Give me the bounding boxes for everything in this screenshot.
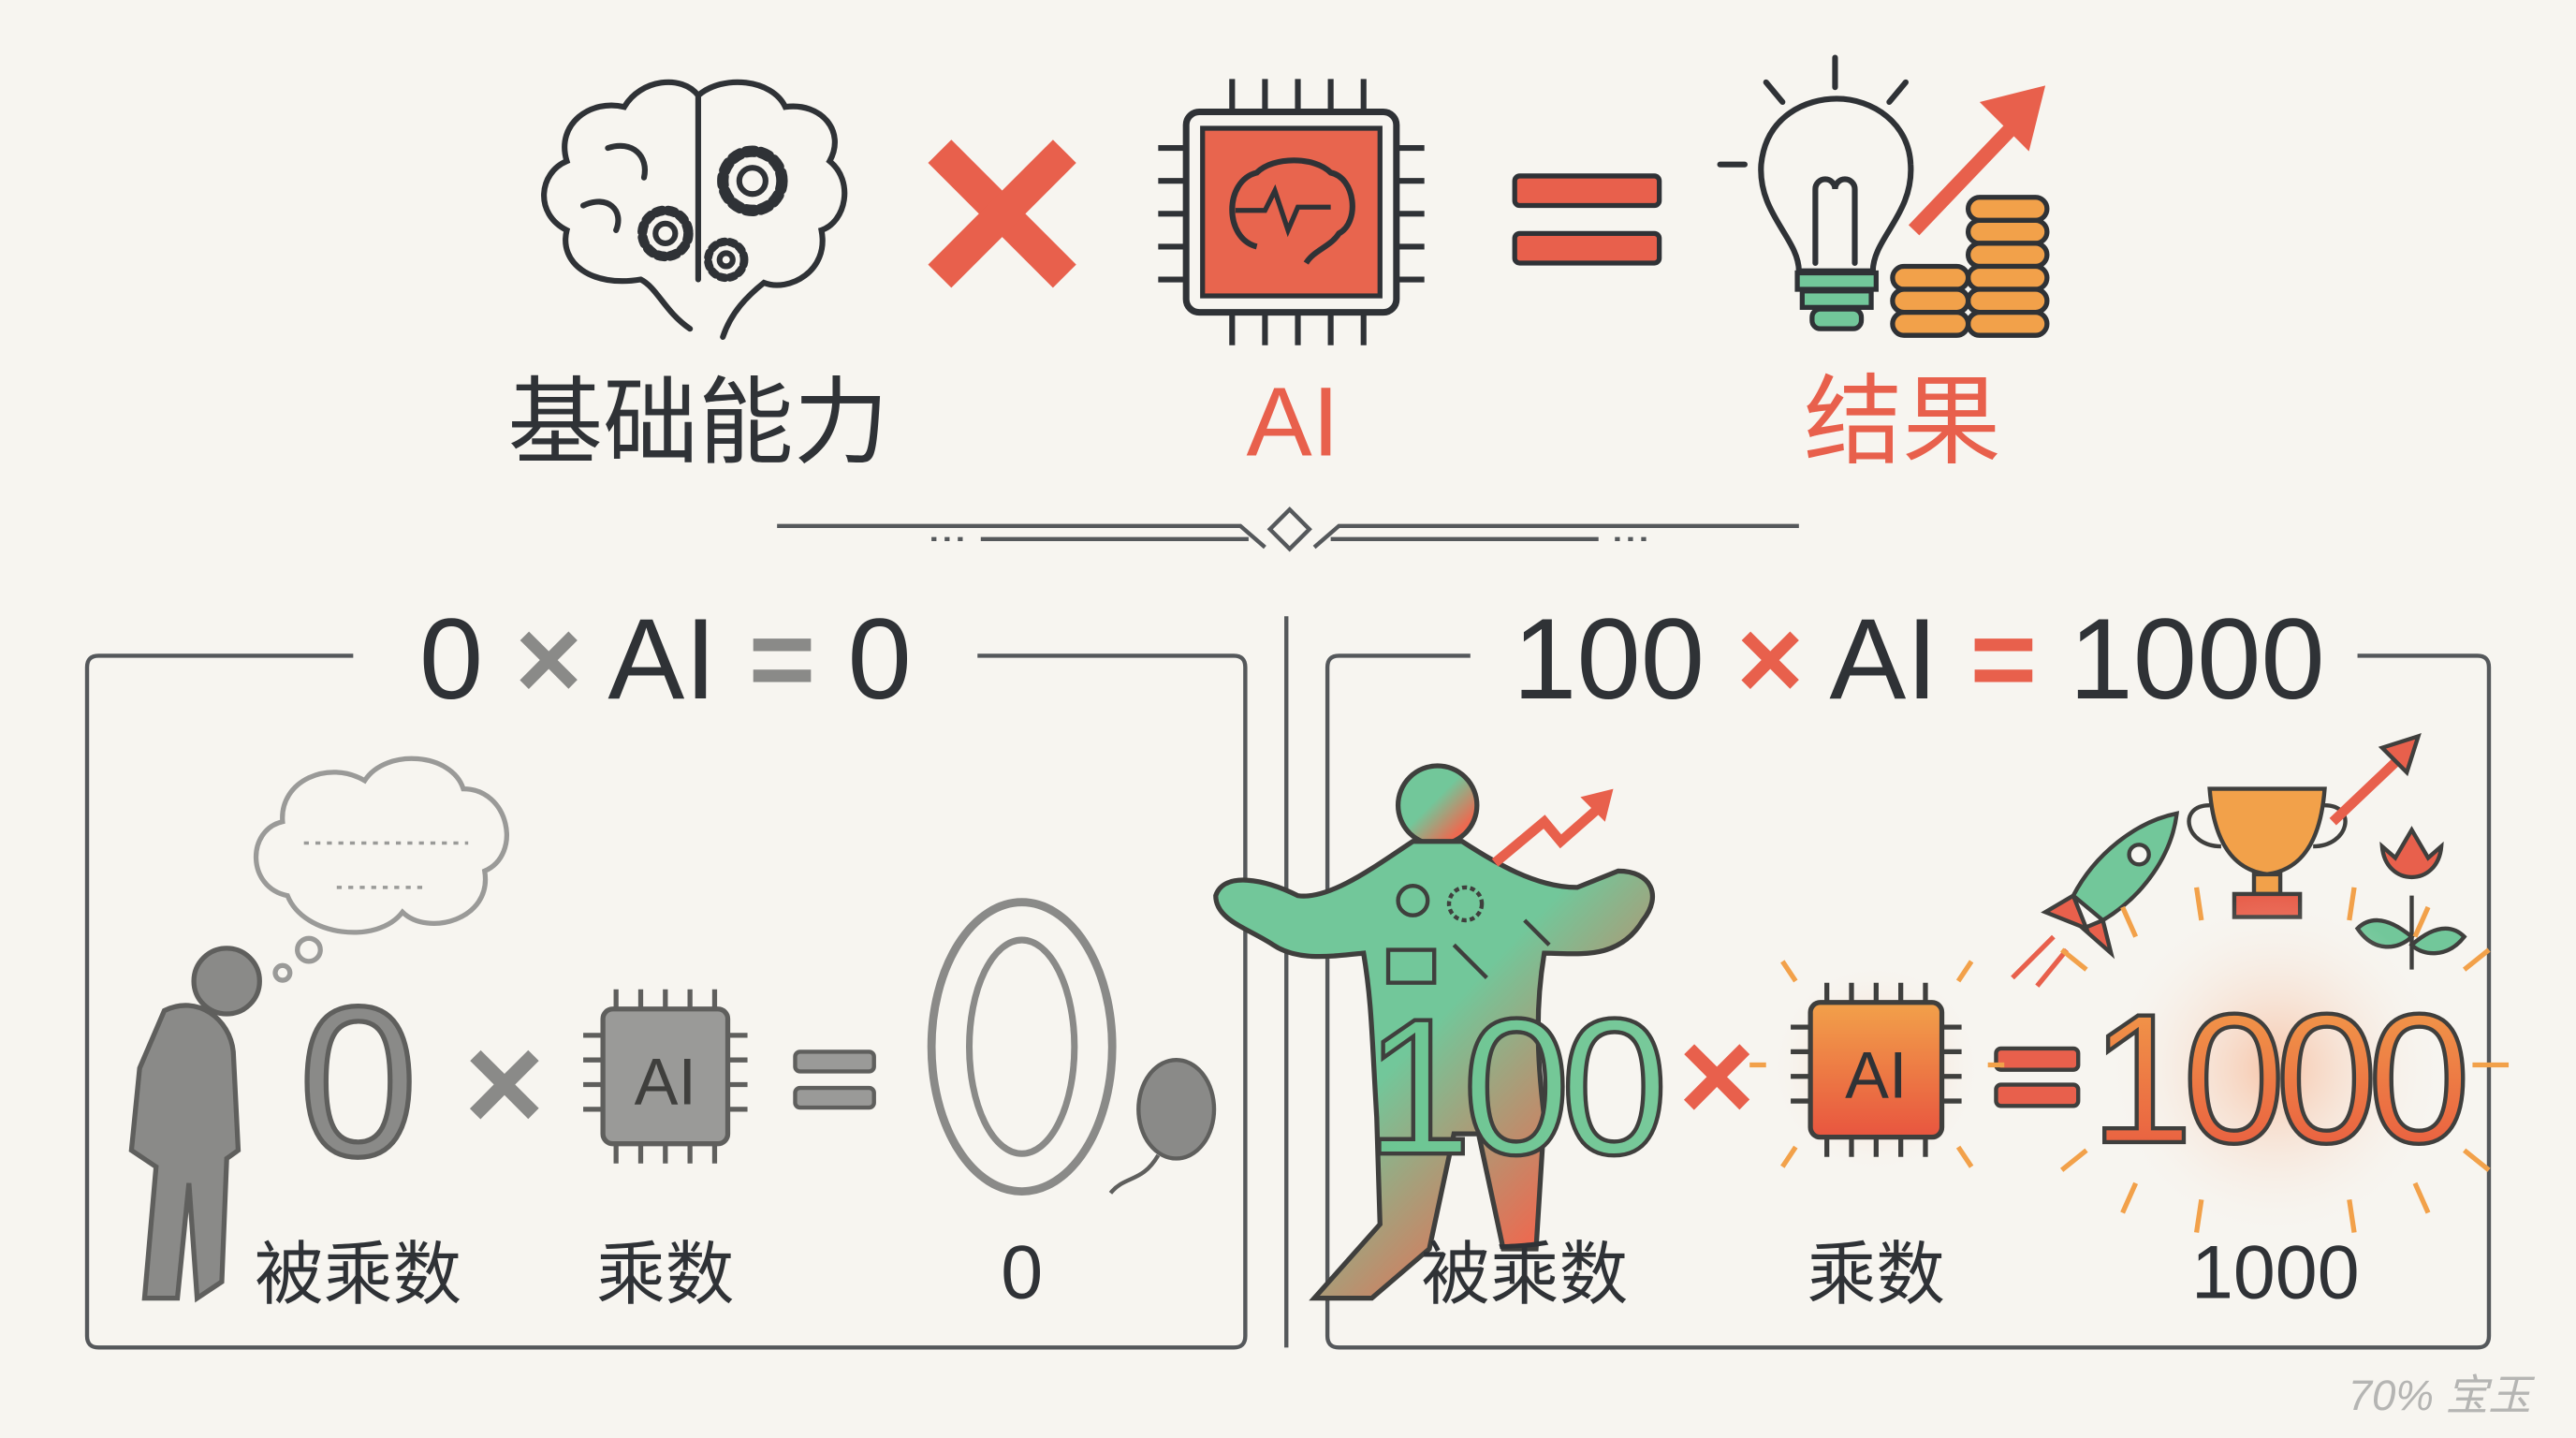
number: 100 green: 100 bbox=[1365, 978, 1661, 1195]
icon: equals bbox=[1515, 176, 1660, 263]
icon: brain with gears bbox=[544, 82, 844, 337]
icon: glowing AI chip bbox=[1769, 961, 1983, 1175]
panel: left 0 x AI = 0 bbox=[87, 595, 1245, 1347]
number: big hollow 0 bbox=[931, 902, 1112, 1192]
icon: gray AI chip bbox=[583, 990, 748, 1164]
number: gray 0: 0 bbox=[299, 962, 417, 1201]
watermark: 70% 宝玉 bbox=[2349, 1372, 2535, 1419]
icon: strong person bbox=[1216, 766, 1652, 1299]
icon: gray AI chip: AI bbox=[635, 1045, 696, 1119]
icon: sad person bbox=[131, 948, 259, 1299]
icon: bulb with arrow and coins bbox=[1720, 58, 2047, 335]
labels: 被乘数 bbox=[255, 1236, 461, 1313]
panel: left 0 x AI = 0: × bbox=[464, 1007, 545, 1161]
label: 基础能力: 基础能力 bbox=[507, 369, 888, 476]
number: 1000 orange with burst: 1000 bbox=[2090, 976, 2464, 1181]
panel: left 0 x AI = 0: 乘数 bbox=[596, 1236, 735, 1313]
panel: left 0 x AI = 0: 0 bbox=[1001, 1231, 1043, 1315]
panel: right 100 x AI = 1000: × bbox=[1678, 1002, 1755, 1149]
icon: rocket, trophy, flower bbox=[2012, 736, 2465, 986]
panel: right 100 x AI = 1000: 乘数 bbox=[1808, 1236, 1945, 1313]
labels: 被乘数 bbox=[1421, 1236, 1628, 1313]
label: AI: AI bbox=[1247, 367, 1339, 477]
heading: 0 × AI = 0: 0 × AI = 0 bbox=[419, 595, 912, 724]
heading: 100 × AI = 1000 bbox=[1513, 595, 2325, 724]
icon: thought cloud bbox=[256, 758, 506, 980]
icon: deflated balloon bbox=[1110, 1060, 1214, 1193]
icon: glowing AI chip: AI bbox=[1845, 1038, 1907, 1112]
panel: right 100 x AI = 1000: 1000 bbox=[2191, 1231, 2360, 1315]
label: 结果: 结果 bbox=[1804, 367, 2001, 477]
icon: red multiply bbox=[940, 152, 1064, 276]
number: 1000 orange with burst bbox=[1749, 888, 2509, 1240]
icon: AI chip bbox=[1158, 79, 1425, 345]
panel: right 100 x AI = 1000 bbox=[1216, 595, 2509, 1347]
